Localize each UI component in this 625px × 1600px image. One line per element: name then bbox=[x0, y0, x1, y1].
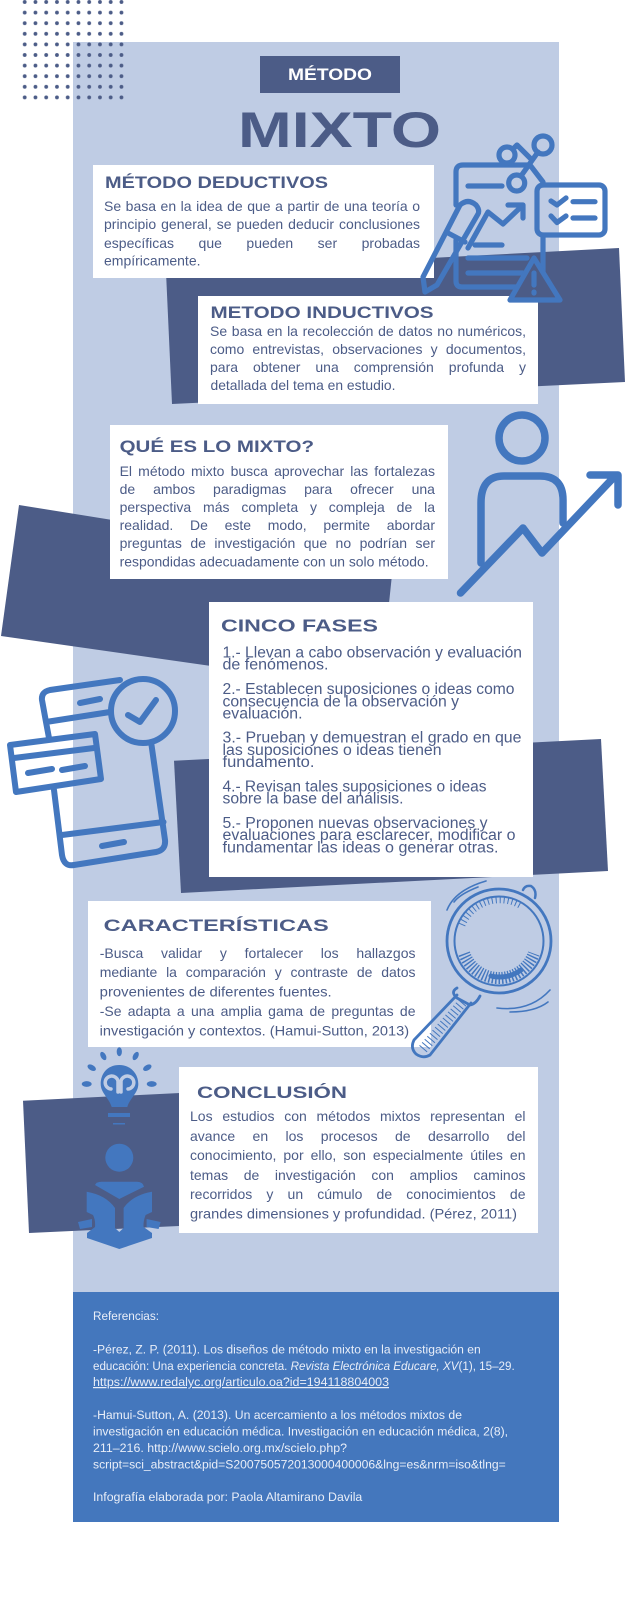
dark shape: mixed bbox=[1, 505, 393, 690]
panel: cinco fases: CINCO FASES bbox=[220, 615, 378, 635]
icon: person with growth arrow bbox=[460, 415, 618, 593]
panel: cinco fases: fundamento. bbox=[222, 754, 314, 771]
panel: características: investigación y contextos. (Hamui-Sutton, 2013) bbox=[100, 1022, 409, 1038]
panel: método deductivos: empíricamente. bbox=[104, 253, 200, 269]
dot grid bbox=[19, 0, 127, 103]
panel: método inductivos: detallada del tema en estudio. bbox=[210, 377, 395, 393]
panel: cinco fases bbox=[208, 602, 533, 877]
panel: características: CARACTERÍSTICAS bbox=[104, 916, 329, 935]
icon: phone with check and card bbox=[10, 679, 175, 865]
panel: qué es lo mixto bbox=[110, 425, 448, 579]
panel: cinco fases: consecuencia de la observación y bbox=[222, 693, 459, 710]
panel: cinco fases: de fenómenos. bbox=[222, 656, 328, 673]
panel: referencias: 211–216. http://www.scielo.org.mx/scielo.php? bbox=[93, 1441, 347, 1455]
panel: método inductivos: Se basa en la recolección de datos no numéricos, bbox=[210, 323, 526, 339]
panel: conclusión: conocimiento, por ello, son especialmente útiles en bbox=[190, 1147, 526, 1163]
panel: conclusión: temas de investigación con amplios caminos bbox=[190, 1166, 526, 1182]
panel: qué es lo mixto: respondidas adecuadamente con un solo método. bbox=[120, 554, 429, 570]
panel: características: -Se adapta a una amplia gama de preguntas de bbox=[100, 1003, 415, 1019]
icon: clipboard with chart, checklist, pencil and warning bbox=[423, 136, 605, 300]
dark shape: phases bbox=[174, 739, 608, 893]
panel: conclusión bbox=[179, 1067, 538, 1233]
panel: qué es lo mixto: de ambos paradigmas para ofrecer una bbox=[120, 481, 435, 497]
panel: cinco fases: 1.- Llevan a cabo observación y evaluación bbox=[222, 644, 522, 661]
panel: método deductivos bbox=[93, 165, 434, 278]
dark shape: inductive bbox=[166, 248, 625, 404]
panel: cinco fases: evaluación. bbox=[222, 705, 302, 722]
panel: método deductivos: principio general, se pueden deducir conclusiones bbox=[104, 216, 420, 232]
panel: método inductivos: METODO INDUCTIVOS bbox=[210, 303, 433, 322]
panel: método deductivos: Se basa en la idea de que a partir de una teoría o bbox=[104, 198, 420, 214]
panel: método inductivos bbox=[198, 296, 538, 404]
main light panel bbox=[73, 42, 559, 1292]
panel: características: mediante la comparación y contraste de datos bbox=[100, 964, 415, 980]
icon: idea bulb bbox=[82, 1047, 157, 1124]
panel: qué es lo mixto: perspectiva más completa y compleja de la bbox=[120, 499, 435, 515]
panel: referencias: investigación en educación médica. Investigación en educación médica, 2(8), bbox=[93, 1424, 508, 1438]
panel: cinco fases: 4.- Revisan tales suposiciones o ideas bbox=[222, 778, 486, 795]
panel: cinco fases: evaluaciones para esclarecer, modificar o bbox=[222, 827, 515, 844]
panel: conclusión: recorridos y un cúmulo de conocimientos de bbox=[190, 1186, 526, 1202]
panel: método deductivos: específicas que pueden ser probadas bbox=[104, 234, 420, 250]
panel: qué es lo mixto: El método mixto busca aprovechar las fortalezas bbox=[120, 462, 435, 478]
dark shape: conclusion bbox=[23, 1092, 190, 1233]
panel: características: provenientes de diferentes fuentes. bbox=[100, 984, 332, 1000]
panel: método inductivos: para obtener una comprensión profunda y bbox=[210, 359, 526, 375]
title: mixto: MIXTO bbox=[238, 102, 441, 158]
panel: cinco fases: fundamentar las ideas o generar otras. bbox=[222, 839, 498, 856]
panel: referencias: -Pérez, Z. P. (2011). Los diseños de método mixto en la investigación en bbox=[93, 1342, 481, 1356]
icon: person reading bbox=[78, 1144, 161, 1249]
panel: cinco fases: 3.- Prueban y demuestran el grado en que bbox=[222, 729, 521, 746]
panel: referencias: -Hamui-Sutton, A. (2013). Un acercamiento a los métodos mixtos de bbox=[93, 1408, 462, 1422]
panel: conclusión: grandes dimensiones y profundidad. (Pérez, 2011) bbox=[190, 1205, 517, 1221]
panel: conclusión: CONCLUSIÓN bbox=[197, 1083, 347, 1102]
panel: cinco fases: las suposiciones o ideas tienen bbox=[222, 741, 441, 758]
panel: referencias: script=sci_abstract&pid=S200750572013000400006&lng=es&nrm=iso&tlng= bbox=[93, 1457, 506, 1471]
panel: qué es lo mixto: realidad. De este modo, permite abordar bbox=[120, 517, 435, 533]
panel: cinco fases: sobre la base del análisis. bbox=[222, 790, 403, 807]
panel: método inductivos: como entrevistas, observaciones y documentos, bbox=[210, 341, 526, 357]
panel: conclusión: avance en los procesos de desarrollo del bbox=[190, 1128, 526, 1144]
badge: método: MÉTODO bbox=[288, 65, 372, 84]
badge: método bbox=[260, 56, 400, 93]
panel: referencias: Referencias: bbox=[93, 1309, 159, 1323]
panel: características bbox=[88, 901, 431, 1047]
panel: características: -Busca validar y fortalecer los hallazgos bbox=[100, 945, 415, 961]
panel: método deductivos: MÉTODO DEDUCTIVOS bbox=[105, 173, 328, 192]
panel: conclusión: Los estudios con métodos mixtos representan el bbox=[190, 1108, 526, 1124]
panel: cinco fases: 5.- Proponen nuevas observaciones y bbox=[222, 815, 487, 832]
panel: referencias bbox=[73, 1292, 559, 1522]
panel: cinco fases: 2.- Establecen suposiciones o ideas como bbox=[222, 681, 514, 698]
panel: qué es lo mixto: preguntas de investigación que no podrían ser bbox=[120, 535, 435, 551]
panel: referencias: https://www.redalyc.org/articulo.oa?id=194118804003 bbox=[93, 1375, 389, 1389]
panel: referencias: Infografía elaborada por: Paola Altamirano Davila bbox=[93, 1490, 362, 1504]
panel: qué es lo mixto: QUÉ ES LO MIXTO? bbox=[120, 437, 314, 456]
panel: referencias: educación: Una experiencia concreta. Revista Electrónica Educare, XV(1), 15–29. bbox=[93, 1359, 515, 1373]
icon: magnifying glass bbox=[412, 881, 551, 1057]
